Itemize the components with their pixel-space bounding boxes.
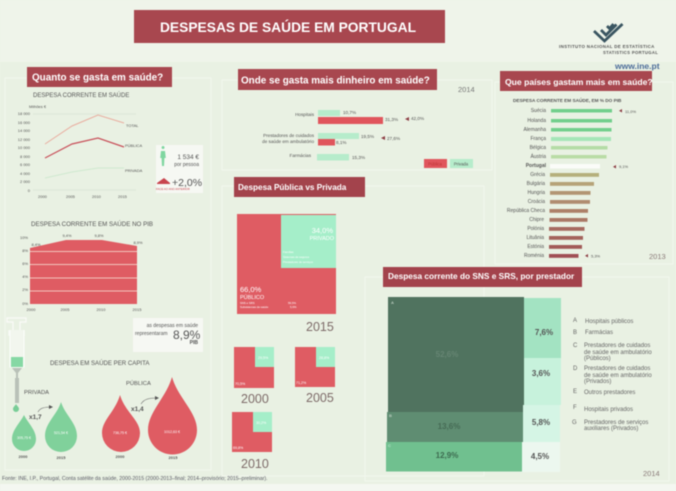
line chart: despesa corrente: DESPESA CORRENTE EM SAÚDE xyxy=(33,92,129,99)
area chart: despesa no PIB: 8% xyxy=(22,248,28,253)
square chart 2000: 29,5% xyxy=(258,356,269,360)
bar chart: países: Suécia xyxy=(531,108,546,114)
bar chart: despesa por prestador: 42,0% xyxy=(411,116,424,121)
private drops: 521,54 € xyxy=(54,431,68,435)
heading: quanto se gasta: Quanto se gasta em saúde? xyxy=(32,72,163,84)
treemap: C xyxy=(388,443,391,448)
line chart: despesa corrente: 2 000 xyxy=(20,179,31,184)
bar chart: países: França xyxy=(530,136,546,142)
panel: onde se gasta: 2014 xyxy=(458,85,475,94)
heading: onde se gasta xyxy=(238,69,437,90)
area chart: despesa no PIB: 2000 xyxy=(27,307,36,312)
bar chart: países: Polónia xyxy=(527,226,544,232)
legend: Farmácias xyxy=(585,330,613,336)
card: percentagem do PIB xyxy=(133,318,203,352)
line chart: despesa corrente: PRIVADA xyxy=(125,168,143,173)
bar chart: países: Bélgica xyxy=(530,145,546,151)
private drops: x1,7 xyxy=(29,414,42,421)
private drops: 2015 xyxy=(57,455,66,460)
bar chart: países: Roménia xyxy=(524,253,544,259)
treemap: 13,6% xyxy=(438,422,460,431)
legend: de saúde em ambulatório xyxy=(584,350,652,356)
treemap: B xyxy=(389,413,392,418)
line chart: despesa corrente: 6 000 xyxy=(20,162,31,167)
area chart: despesa no PIB: 9,8% xyxy=(94,233,104,238)
bar chart: países: Alemanha xyxy=(523,127,546,133)
legend: Privada xyxy=(454,162,469,166)
legend: D xyxy=(573,366,578,372)
public drops: 736,75 € xyxy=(113,431,127,435)
line chart: despesa corrente: 2000 xyxy=(38,194,48,199)
bar chart: países: República Checa xyxy=(507,208,545,214)
legend: A xyxy=(573,318,577,324)
square chart 2015: 34,0% xyxy=(312,226,333,235)
panel: que países gastam xyxy=(500,71,666,261)
panel: que países gastam: 11,0% xyxy=(625,109,636,114)
legend: Hospitais privados xyxy=(584,407,633,413)
panel: que países gastam: 2013 xyxy=(649,252,666,261)
card: gasto por pessoa: +2,0% xyxy=(172,177,202,189)
square chart 2005: 71,2% xyxy=(296,381,307,385)
private drops xyxy=(12,390,77,460)
line chart: despesa corrente: 16 000 xyxy=(18,120,31,125)
legend: C xyxy=(573,343,578,349)
chart: despesa per capita: DESPESA EM SAÚDE PER CAPITA xyxy=(50,360,150,367)
legend: E xyxy=(573,389,577,395)
treemap: 7,6% xyxy=(535,328,553,337)
card: gasto por pessoa xyxy=(156,145,203,193)
bar chart: países: Portugal xyxy=(526,163,547,169)
legend xyxy=(424,159,473,168)
bar chart: despesa por prestador: 31,3% xyxy=(385,117,398,122)
legend: Outros prestadores xyxy=(584,390,635,396)
panel: que países gastam: 9,1% xyxy=(619,164,629,169)
card: percentagem do PIB: PIB xyxy=(190,340,198,346)
square chart 2015: 2015 xyxy=(306,320,334,334)
area chart: despesa no PIB: 9,4% xyxy=(62,233,72,238)
legend: Prestadores de cuidados xyxy=(584,343,650,349)
public drops: 2015 xyxy=(169,455,178,460)
icon: increase arrow xyxy=(157,178,170,184)
chart: despesa per capita xyxy=(12,360,197,460)
icon: person xyxy=(160,146,166,166)
icon: syringe xyxy=(7,318,26,412)
treemap: 12,9% xyxy=(436,451,458,460)
line chart: despesa corrente: 18 000 xyxy=(18,111,31,116)
legend: Pública xyxy=(428,162,443,166)
line chart: despesa corrente: PÚBLICA xyxy=(125,143,142,148)
area chart: despesa no PIB: 2% xyxy=(22,287,28,292)
bar chart: despesa por prestador: Hospitais xyxy=(295,112,315,117)
panel: despesa SNS por prestador xyxy=(383,267,660,478)
bar chart: países: Estónia xyxy=(527,244,544,250)
area chart: despesa no PIB: 8,4% xyxy=(31,242,41,247)
square chart 2015: Subsistemas de saúde xyxy=(240,305,269,309)
private drops: 2000 xyxy=(19,454,28,459)
legend: B xyxy=(573,330,577,336)
square chart 2015: Famílias xyxy=(283,250,294,254)
bar chart: países: Lituânia xyxy=(526,235,544,241)
line chart: despesa corrente: Milhões € xyxy=(29,104,47,109)
public drops: 2000 xyxy=(116,454,125,459)
heading: SNS: Despesa corrente do SNS e SRS, por prestador xyxy=(388,271,575,281)
title xyxy=(134,10,445,43)
bar chart: despesa por prestador: 8,1% xyxy=(336,140,346,145)
card: percentagem do PIB: as despesas em saúde xyxy=(147,323,198,329)
public drops: x1,4 xyxy=(131,406,144,413)
bar chart: despesa por prestador: Farmácias xyxy=(290,153,312,158)
area chart: despesa no PIB: 4% xyxy=(22,274,28,279)
bar chart: países: Áustria xyxy=(530,153,546,160)
bar chart: despesa por prestador: 10,7% xyxy=(343,110,356,115)
legend: auxiliares (Privados) xyxy=(584,426,638,432)
area chart: despesa no PIB: 6% xyxy=(22,261,28,266)
card: gasto por pessoa: FACE AO ANO ANTERIOR xyxy=(156,187,190,191)
legend: F xyxy=(573,405,577,411)
icon: INE logo xyxy=(559,24,658,55)
square chart 2015: 59,5% xyxy=(288,301,296,305)
panel: onde se gasta xyxy=(238,69,475,168)
legend xyxy=(572,318,652,432)
area chart: despesa no PIB: 10% xyxy=(20,235,28,240)
bar chart: países: Holanda xyxy=(527,118,546,124)
bar chart: despesa por prestador: 15,3% xyxy=(352,155,365,160)
heading: pública vs privada: Despesa Pública vs Privada xyxy=(238,183,347,192)
square chart 2010 xyxy=(232,412,272,471)
bar chart: despesa por prestador xyxy=(262,110,473,168)
bar chart: despesa por prestador: de saúde em ambulatório xyxy=(262,139,314,144)
card: gasto por pessoa: 1 534 € xyxy=(177,154,199,161)
square chart 2000: 2000 xyxy=(241,392,269,406)
square chart 2010: 69,8% xyxy=(233,446,244,450)
area chart: despesa no PIB: 2005 xyxy=(61,307,70,312)
heading: onde se gasta: Onde se gasta mais dinheiro em saúde? xyxy=(241,76,430,86)
line chart: despesa corrente: 0 xyxy=(28,188,31,193)
website link: www.ine.pt xyxy=(614,61,660,71)
square chart 2005: 2005 xyxy=(306,391,334,405)
line chart: despesa corrente: 10 000 xyxy=(18,145,31,150)
panel: quanto se gasta xyxy=(7,67,203,460)
line chart: despesa corrente: 2010 xyxy=(92,194,102,199)
heading: quanto se gasta xyxy=(27,67,172,87)
bar chart: despesa por prestador: Prestadores de cuidados xyxy=(263,133,315,138)
square chart 2015: SNS e SRS xyxy=(240,301,255,305)
bar chart: países: Croácia xyxy=(528,199,545,205)
panel: despesa SNS por prestador: 2014 xyxy=(643,469,660,478)
area chart: despesa no PIB: 8,9% xyxy=(133,240,143,245)
bar chart: despesa por prestador: 27,6% xyxy=(387,136,400,141)
title: DESPESAS DE SAÚDE EM PORTUGAL xyxy=(160,18,416,35)
legend: Prestadores de serviços xyxy=(584,420,648,426)
square chart 2015: PRIVADO xyxy=(310,236,335,242)
panel: pública vs privada xyxy=(232,177,365,471)
square chart 2015: Prestadores de serviços xyxy=(283,260,314,264)
square chart 2005 xyxy=(295,347,335,405)
square chart 2015: Sistemas de seguros xyxy=(283,255,310,259)
line chart: despesa corrente: 4 000 xyxy=(20,171,31,176)
card: percentagem do PIB: 8,9% xyxy=(173,328,201,342)
square chart 2010: 2010 xyxy=(241,457,269,471)
bar chart: países: Chipre xyxy=(529,217,544,223)
private drops: 305,75 € xyxy=(17,436,31,440)
private drops: PRIVADA xyxy=(24,390,49,396)
bar chart: países: Grécia xyxy=(530,172,545,178)
square chart 2015: 66,0% xyxy=(240,285,262,294)
legend: G xyxy=(572,420,577,426)
square chart 2015: 5,6% xyxy=(290,305,297,309)
bar chart: países: Hungria xyxy=(527,190,545,196)
treemap: 3,6% xyxy=(532,369,550,378)
line chart: despesa corrente: 2005 xyxy=(66,194,76,199)
square chart 2000 xyxy=(234,347,274,406)
public drops: 1012,63 € xyxy=(164,430,180,434)
public drops xyxy=(102,377,197,460)
heading: que países xyxy=(500,71,653,91)
heading: SNS xyxy=(383,267,582,287)
area chart: despesa no PIB: DESPESA CORRENTE EM SAÚDE NO PIB xyxy=(31,221,153,228)
legend: de saúde em ambulatório xyxy=(584,373,652,379)
square chart 2010: 30,2% xyxy=(256,421,267,425)
source footnote: Fonte: INE, I.P., Portugal, Conta satélite da saúde, 2000-2015 (2000-2013–final; 2014–provisório; 2015–preliminar). xyxy=(2,476,268,482)
treemap: 52,6% xyxy=(436,350,458,359)
area chart: despesa no PIB: 0% xyxy=(22,301,28,306)
line chart: despesa corrente: TOTAL xyxy=(126,123,139,128)
treemap: A xyxy=(391,300,394,305)
area chart: despesa no PIB xyxy=(20,221,153,312)
public drops: PÚBLICA xyxy=(126,380,151,387)
line chart: despesa corrente: 14 000 xyxy=(18,128,31,133)
legend: Hospitais públicos xyxy=(585,319,633,325)
legend: (Privados) xyxy=(584,379,611,385)
line chart: despesa corrente xyxy=(18,92,143,199)
card: percentagem do PIB: representaram xyxy=(135,331,168,337)
line chart: despesa corrente: 8 000 xyxy=(20,154,31,159)
line chart: despesa corrente: 2015 xyxy=(118,194,128,199)
square chart 2005: 28,8% xyxy=(319,356,330,360)
panel: que países gastam: 5,3% xyxy=(591,254,601,258)
panel: que países gastam: DESPESA CORRENTE EM SAÚDE, EM % DO PIB xyxy=(513,97,622,103)
square chart 2015: PÚBLICO xyxy=(240,294,265,301)
icon: INE logo: STATISTICS PORTUGAL xyxy=(603,50,658,55)
heading: pública vs privada xyxy=(234,177,365,197)
bar chart: países: Bulgária xyxy=(527,181,545,187)
legend: (Públicos) xyxy=(584,356,611,362)
area chart: despesa no PIB: 2015 xyxy=(133,307,142,312)
area chart: despesa no PIB: 2010 xyxy=(97,307,106,312)
square chart 2015 xyxy=(237,214,336,334)
card: gasto por pessoa: por pessoa xyxy=(174,162,199,168)
treemap: 5,8% xyxy=(532,418,550,427)
bar chart: despesa por prestador: 19,5% xyxy=(361,134,374,139)
square chart 2000: 70,5% xyxy=(235,382,246,386)
bar chart: países xyxy=(507,108,612,259)
treemap xyxy=(386,297,561,472)
line chart: despesa corrente: 12 000 xyxy=(18,137,31,142)
icon: INE logo: INSTITUTO NACIONAL DE ESTATÍSTICA xyxy=(559,44,655,49)
heading: que países: Que países gastam mais em saúde? xyxy=(505,77,653,87)
legend: Prestadores de cuidados xyxy=(584,366,650,372)
treemap: 4,5% xyxy=(531,452,549,461)
